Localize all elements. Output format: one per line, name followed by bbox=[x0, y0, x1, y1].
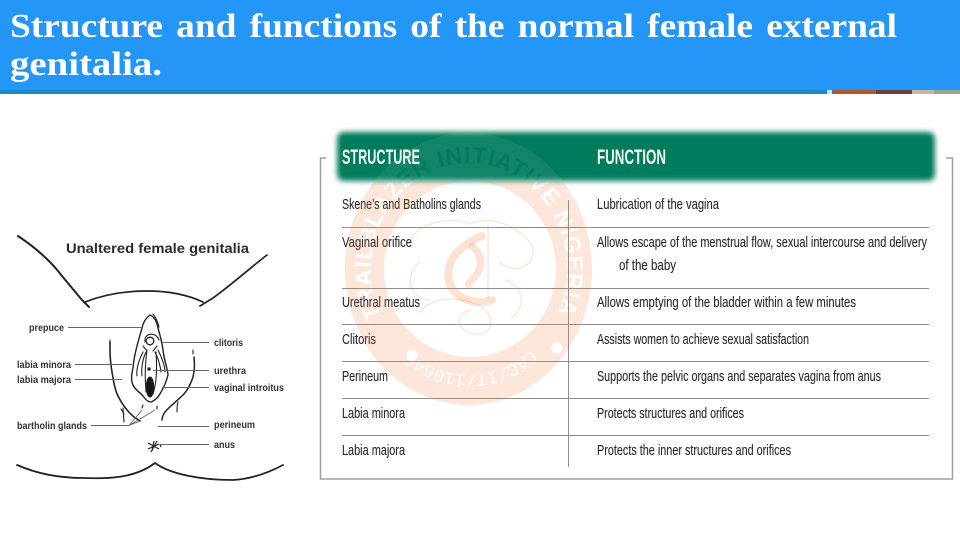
body outline bbox=[17, 236, 283, 480]
table header band: FUNCTION bbox=[597, 146, 666, 169]
diagram labels: prepuce bbox=[29, 323, 64, 334]
table panel bbox=[320, 132, 952, 479]
diagram labels: labia majora bbox=[17, 375, 71, 386]
function column: Protects structures and orifices bbox=[597, 405, 744, 422]
table header band bbox=[337, 132, 935, 181]
anus mark bbox=[148, 441, 161, 452]
diagram labels: perineum bbox=[214, 420, 255, 431]
structure column: Vaginal orifice bbox=[342, 234, 412, 251]
structure column: Clitoris bbox=[342, 331, 376, 348]
function column: Assists women to achieve sexual satisfaction bbox=[597, 331, 809, 348]
function column bbox=[597, 196, 927, 459]
seal ring bbox=[345, 133, 592, 405]
function column: Protects the inner structures and orifices bbox=[597, 442, 791, 459]
diagram labels: anus bbox=[214, 440, 235, 451]
diagram labels: urethra bbox=[214, 366, 246, 377]
diagram heading: Unaltered female genitalia bbox=[66, 240, 249, 256]
structure column: Urethral meatus bbox=[342, 294, 420, 311]
vulva drawing bbox=[110, 314, 194, 422]
structure column: Labia minora bbox=[342, 405, 405, 422]
structure column: Labia majora bbox=[342, 442, 405, 459]
diagram labels: clitoris bbox=[214, 338, 243, 349]
title banner bbox=[0, 0, 960, 94]
title: Structure and functions of the normal female external bbox=[10, 8, 897, 45]
function column: Lubrication of the vagina bbox=[597, 196, 719, 213]
leader lines bbox=[68, 328, 209, 444]
function column: of the baby bbox=[619, 257, 676, 274]
title: genitalia. bbox=[10, 46, 162, 83]
structure column: Perineum bbox=[342, 368, 388, 385]
watermark seal bbox=[345, 133, 592, 405]
diagram labels: vaginal introitus bbox=[214, 383, 284, 394]
diagram labels: labia minora bbox=[17, 360, 71, 371]
diagram labels bbox=[17, 323, 284, 451]
seal monogram bbox=[410, 220, 533, 334]
table header band: STRUCTURE bbox=[342, 146, 420, 169]
diagram: unaltered female genitalia bbox=[17, 236, 284, 480]
table frame bbox=[320, 158, 952, 479]
table rules bbox=[342, 200, 929, 467]
structure column: Skene’s and Batholins glands bbox=[342, 196, 481, 213]
structure column bbox=[342, 196, 481, 459]
diagram labels: bartholin glands bbox=[17, 421, 87, 432]
function column: Allows emptying of the bladder within a few minutes bbox=[597, 294, 856, 311]
